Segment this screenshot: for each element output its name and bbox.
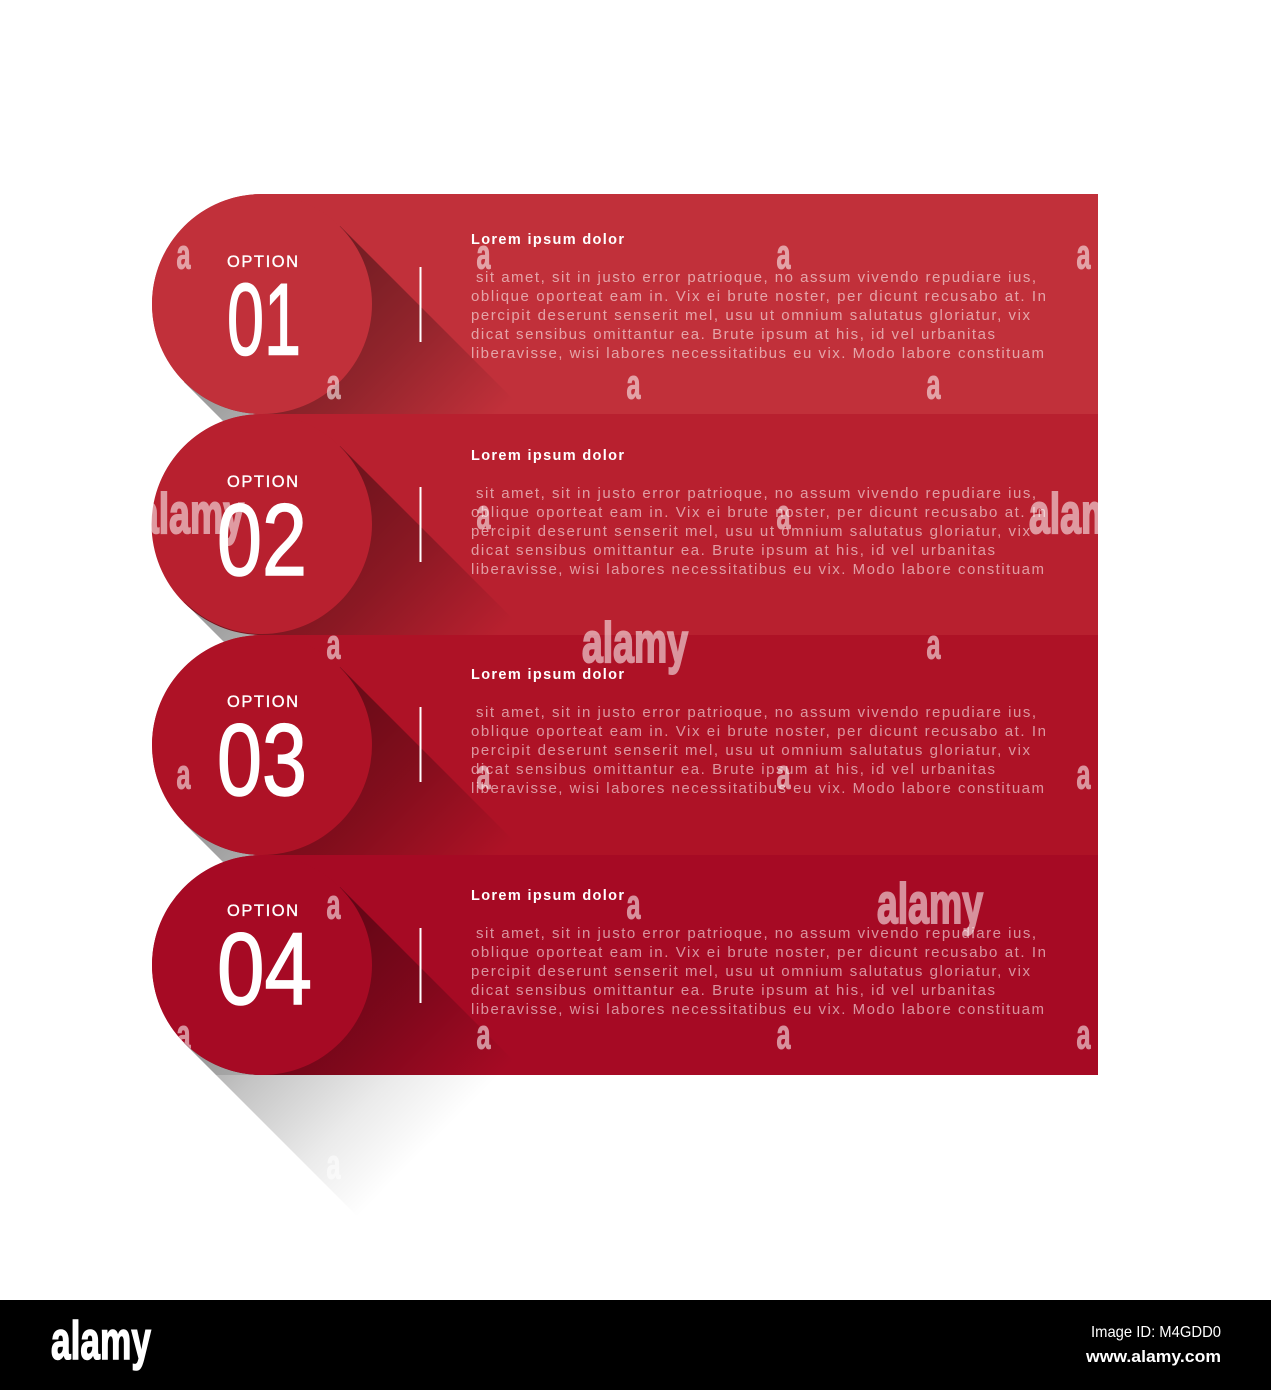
long shadow 04 on white: [216, 1075, 500, 1217]
body text 02: [471, 485, 1046, 578]
heading 01: Lorem ipsum dolor: [471, 232, 624, 248]
panel: option 03: [152, 635, 1098, 997]
body text 02: percipit deserunt senserit mel, usu ut omnium salutatus gloriatur, vix: [471, 523, 1030, 540]
watermarks: a: [476, 230, 491, 278]
number 02: 02: [217, 483, 307, 597]
watermarks: a: [176, 230, 191, 278]
watermarks: a: [1076, 750, 1091, 798]
body text 04: percipit deserunt senserit mel, usu ut omnium salutatus gloriatur, vix: [471, 963, 1030, 980]
divider 02: [420, 487, 422, 562]
image id: Image ID: M4GDD0: [1091, 1324, 1221, 1341]
band 03: [152, 635, 1098, 855]
watermarks: alamy: [138, 482, 244, 546]
circle 02: [152, 414, 372, 634]
long shadow 04 on band: [184, 887, 514, 1075]
label: option 03: OPTION: [227, 693, 298, 711]
watermarks: a: [1076, 1010, 1091, 1058]
divider 04: [420, 928, 422, 1003]
body text 01: liberavisse, wisi labores necessitatibus eu vix. Modo labore constituam: [471, 345, 1044, 362]
watermarks: a: [1076, 230, 1091, 278]
watermarks: a: [926, 360, 941, 408]
number 04: 04: [217, 912, 312, 1026]
band 01: [152, 194, 1098, 414]
body text 04: oblique oporteat eam in. Vix ei brute noster, per dicunt recusabo at. In: [471, 944, 1046, 961]
body text 01: oblique oporteat eam in. Vix ei brute noster, per dicunt recusabo at. In: [471, 288, 1046, 305]
heading 02: Lorem ipsum dolor: [471, 448, 624, 464]
watermarks: a: [926, 620, 941, 668]
watermarks: a: [776, 1010, 791, 1058]
watermarks: alamy: [582, 611, 688, 675]
body text 03: [471, 704, 1046, 797]
watermarks: a: [326, 620, 341, 668]
body text 03: percipit deserunt senserit mel, usu ut omnium salutatus gloriatur, vix: [471, 742, 1030, 759]
label: option 01: OPTION: [227, 253, 298, 271]
body text 02: sit amet, sit in justo error patrioque, no assum vivendo repudiare ius,: [476, 485, 1036, 502]
watermarks: alamy: [877, 872, 983, 936]
body text 02: dicat sensibus omittantur ea. Brute ipsum at his, id vel urbanitas: [471, 542, 995, 559]
watermarks: a: [326, 1140, 341, 1188]
watermarks: a: [176, 750, 191, 798]
body text 04: [471, 925, 1046, 1018]
panel: option 02: [152, 414, 1098, 776]
long shadow 02: [184, 446, 514, 776]
watermarks: a: [476, 1010, 491, 1058]
panel: option 04: [152, 855, 1098, 1217]
watermarks: [138, 230, 1135, 1188]
body text 01: dicat sensibus omittantur ea. Brute ipsum at his, id vel urbanitas: [471, 326, 995, 343]
body text 01: [471, 269, 1046, 362]
divider 03: [420, 707, 422, 782]
divider 01: [420, 267, 422, 342]
label: option 02: OPTION: [227, 473, 298, 491]
number 01: 01: [227, 262, 301, 376]
body text 01: sit amet, sit in justo error patrioque, no assum vivendo repudiare ius,: [476, 269, 1036, 286]
number 03: 03: [217, 703, 307, 817]
body text 04: liberavisse, wisi labores necessitatibus eu vix. Modo labore constituam: [471, 1001, 1044, 1018]
watermarks: a: [326, 360, 341, 408]
band 04: [152, 855, 1098, 1075]
watermarks: alamy: [1029, 482, 1135, 546]
long shadow 03: [184, 667, 514, 997]
body text 01: percipit deserunt senserit mel, usu ut omnium salutatus gloriatur, vix: [471, 307, 1030, 324]
watermarks: a: [776, 230, 791, 278]
footer logo: alamy: [51, 1311, 151, 1371]
watermarks: a: [776, 750, 791, 798]
watermarks: a: [476, 490, 491, 538]
long shadow 01: [184, 226, 514, 556]
website: www.alamy.com: [1085, 1347, 1221, 1366]
body text 04: dicat sensibus omittantur ea. Brute ipsum at his, id vel urbanitas: [471, 982, 995, 999]
watermarks: a: [776, 490, 791, 538]
band 02: [152, 414, 1098, 635]
body text 03: sit amet, sit in justo error patrioque, no assum vivendo repudiare ius,: [476, 704, 1036, 721]
circle 04: [152, 855, 372, 1075]
label: option 04: OPTION: [227, 902, 298, 920]
footer bar: [0, 1300, 1271, 1390]
body text 02: oblique oporteat eam in. Vix ei brute noster, per dicunt recusabo at. In: [471, 504, 1046, 521]
body text 02: liberavisse, wisi labores necessitatibus eu vix. Modo labore constituam: [471, 561, 1044, 578]
watermarks: a: [326, 880, 341, 928]
heading 04: Lorem ipsum dolor: [471, 888, 624, 904]
body text 03: liberavisse, wisi labores necessitatibus eu vix. Modo labore constituam: [471, 780, 1044, 797]
watermarks: a: [626, 360, 641, 408]
watermarks: a: [476, 750, 491, 798]
body text 04: sit amet, sit in justo error patrioque, no assum vivendo repudiare ius,: [476, 925, 1036, 942]
body text 03: dicat sensibus omittantur ea. Brute ipsum at his, id vel urbanitas: [471, 761, 995, 778]
panel: option 01: [152, 194, 1098, 556]
body text 03: oblique oporteat eam in. Vix ei brute noster, per dicunt recusabo at. In: [471, 723, 1046, 740]
heading 03: Lorem ipsum dolor: [471, 667, 624, 683]
watermarks: a: [176, 1010, 191, 1058]
watermarks: a: [626, 880, 641, 928]
circle 01: [152, 194, 372, 414]
circle 03: [152, 635, 372, 855]
